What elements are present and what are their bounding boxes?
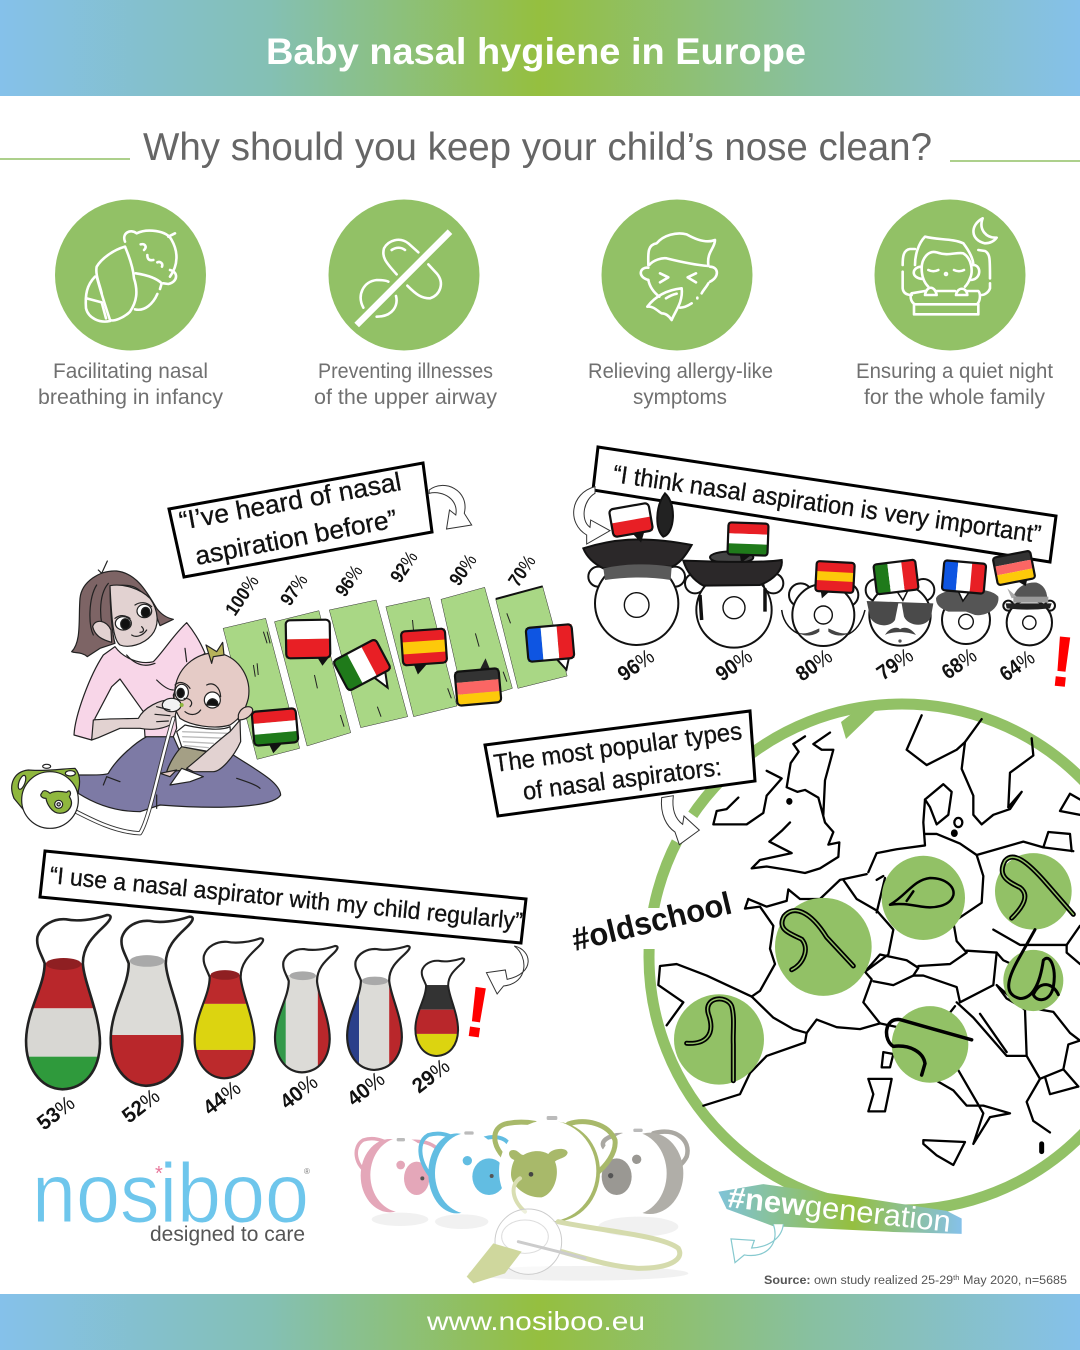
icon: swaddled baby: [86, 231, 176, 322]
percent labels: 40%: [343, 1068, 389, 1111]
nozzle and clear bubble: [467, 1209, 585, 1283]
callout: heard of nasal aspiration: “I’ve heard of nasal: [177, 466, 403, 536]
device: green nosiboo: [12, 764, 80, 828]
percent labels: 97%: [277, 571, 313, 610]
arrow: regular use to penguins: [486, 946, 528, 994]
aspirator: France: [782, 911, 853, 970]
icons: aspirators per country: [687, 857, 1073, 1081]
source note: Source: own study realized 25-29: [764, 1275, 942, 1287]
caption: Ensuring a quiet night: [856, 360, 1053, 383]
aspirator: Germany bulb: [890, 878, 954, 907]
device: blue: [420, 1131, 508, 1214]
caption: symptoms: [633, 386, 727, 409]
callout: heard of nasal aspiration: [169, 463, 432, 577]
head: France: [936, 589, 998, 644]
hashtag: newgeneration: #newgeneration: [726, 1181, 953, 1239]
caption: of the upper airway: [314, 386, 498, 409]
caption: Facilitating nasal: [53, 360, 208, 383]
callout: most popular types: [485, 711, 755, 816]
bottle: Spain: [191, 938, 263, 1079]
header banner: [0, 0, 1080, 96]
logo: nosiboo: nosiboo: [32, 1146, 309, 1240]
icon: sneezing face: [641, 233, 717, 320]
icon: sleeping child with moon: [903, 218, 997, 314]
arrow: newgeneration to devices: [731, 1224, 783, 1263]
hashtag: oldschool: #oldschool: [568, 885, 735, 958]
head: Germany: [1003, 583, 1055, 645]
mother: hair: [72, 571, 173, 657]
arrow: important to heads: [574, 487, 610, 544]
percent labels: [222, 548, 541, 620]
bottle: Germany: [413, 958, 464, 1057]
percent labels: 100%: [222, 572, 264, 620]
percent labels: 44%: [199, 1077, 245, 1120]
flag: Poland: [609, 503, 655, 547]
aspirator: Spain: [687, 999, 734, 1081]
head: Poland: [583, 493, 692, 645]
product: nosiboo devices: [356, 1116, 688, 1283]
caption: breathing in infancy: [38, 386, 224, 409]
percent labels: 80%: [792, 645, 837, 686]
aspirator: Hungary: [1009, 930, 1058, 1000]
device: grey: [597, 1129, 688, 1215]
percent labels: 64%: [996, 646, 1039, 686]
panel: benefit 2: [314, 200, 498, 409]
callout: regular use: “I use a nasal aspirator with my child regularly”: [48, 862, 524, 935]
aspirator: Italy: [887, 1019, 972, 1075]
arrow: popular types to map: [661, 796, 699, 845]
bottle: Hungary: [21, 915, 111, 1090]
caption: [856, 360, 1053, 409]
aspirator tip: [162, 698, 181, 712]
percent labels: 90%: [712, 645, 757, 686]
head: Hungary: [683, 551, 783, 648]
percent labels: 96%: [332, 562, 368, 601]
mother: pink top: [74, 623, 205, 740]
caption: [38, 360, 224, 409]
title: Baby nasal hygiene in Europe: [266, 31, 806, 72]
panel: aspiration is very important chart: [574, 447, 1079, 703]
panel: benefit 3: [588, 200, 773, 409]
percent labels: 90%: [446, 551, 482, 590]
bottle: France: [344, 946, 410, 1072]
illustration: mother and baby using aspirator: [12, 561, 281, 833]
percent labels: 29%: [408, 1055, 454, 1098]
callout: very important: “I think nasal aspiration is very important”: [611, 460, 1043, 549]
flag: Germany: [454, 657, 501, 706]
percent labels: 52%: [118, 1085, 164, 1128]
chart: aspirator bottles with flags: [21, 915, 464, 1090]
head: Italy: [866, 579, 934, 646]
callout: most popular types: The most popular types: [492, 717, 744, 778]
aspirator tube: [62, 718, 173, 833]
source note: May 2020, n=5685: [960, 1275, 1067, 1287]
mother: face: [110, 585, 157, 646]
percent labels: 40%: [276, 1071, 322, 1114]
device: green: [495, 1116, 615, 1222]
callout: most popular types: of nasal aspirators:: [521, 753, 723, 806]
map: outline of Europe: [658, 715, 1080, 1165]
exclamation mark: !: [460, 972, 495, 1054]
baby: legs: [167, 747, 207, 772]
aspirator: Poland: [1002, 857, 1073, 918]
caption: Relieving allergy-like: [588, 360, 773, 383]
panel: benefit 4: [856, 200, 1053, 409]
character heads: [583, 493, 1055, 648]
flag: Spain: [401, 629, 448, 675]
callout: heard of nasal aspiration: aspiration before”: [193, 503, 400, 571]
footer banner: [0, 1294, 1080, 1350]
flag: Germany: [993, 551, 1036, 591]
device: pink: [356, 1138, 437, 1212]
percent labels: 53%: [33, 1092, 79, 1135]
flag: France: [526, 624, 575, 673]
source note: th: [953, 1275, 960, 1282]
flag: Italy: [333, 639, 398, 705]
percent labels: 92%: [387, 548, 423, 587]
logo: nosiboo: designed to care: [150, 1223, 305, 1246]
flag: France: [941, 560, 986, 603]
old-school aspirator spots on map: [674, 853, 1072, 1085]
bottle: Italy: [272, 946, 338, 1074]
icon: crossed-out nose: [357, 232, 450, 325]
percent labels: [33, 1055, 454, 1135]
shadows: [372, 1213, 688, 1281]
logo: nosiboo: *: [155, 1163, 163, 1185]
flag: Hungary: [727, 522, 769, 564]
mother: fingers: [155, 707, 170, 722]
panel: regular use chart: [21, 851, 528, 1135]
caption: [588, 360, 773, 409]
bottle: Poland: [106, 917, 193, 1087]
green ring: [635, 702, 1080, 1210]
panel: benefit 1: [38, 200, 224, 409]
tube: [558, 1222, 680, 1268]
percent labels: 70%: [505, 552, 541, 591]
mother: trousers: [78, 737, 281, 812]
logo: nosiboo: ®: [304, 1167, 310, 1176]
panel: heard of nasal aspiration chart: [169, 463, 575, 759]
flag: Italy: [873, 560, 920, 603]
baby: striped body: [177, 725, 232, 752]
caption: Preventing illnesses: [318, 360, 493, 383]
website: www.nosiboo.eu: [426, 1306, 645, 1336]
caption: for the whole family: [864, 386, 1045, 409]
exclamation mark: !: [1046, 621, 1079, 703]
mother: left arm holding baby: [187, 720, 241, 772]
percent labels: [614, 644, 1039, 686]
percent labels: 79%: [873, 644, 918, 685]
flag: Poland: [286, 620, 330, 666]
percent labels: 96%: [614, 645, 659, 686]
arrow: heard to bars: [429, 485, 472, 529]
flag: Hungary: [252, 708, 299, 755]
bar chart: [223, 586, 567, 759]
percent labels: 68%: [938, 644, 981, 684]
head: Spain: [782, 583, 865, 646]
flag: Spain: [815, 561, 855, 600]
subtitle heading: Why should you keep your child’s nose clean?: [143, 126, 932, 169]
map panel: green ring and Europe: [635, 702, 1080, 1210]
mother: right arm and hand: [92, 700, 176, 740]
caption: [314, 360, 498, 409]
baby: head: [174, 653, 249, 727]
